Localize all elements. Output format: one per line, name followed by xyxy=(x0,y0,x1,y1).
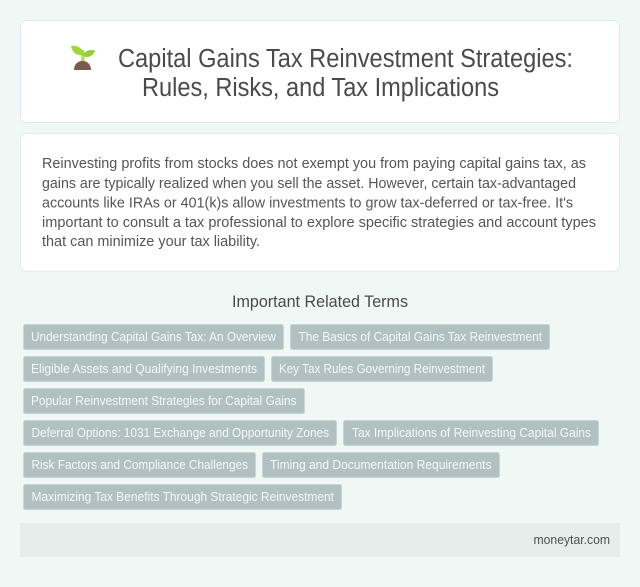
chip: risk factors: Risk Factors and Compliance Challenges xyxy=(32,457,248,472)
title text: Rules, Risks, and Tax Implications xyxy=(142,74,499,102)
chip: timing and documentation: Timing and Documentation Requirements xyxy=(270,457,492,472)
chip: basics of reinvestment xyxy=(290,324,550,350)
panel: summary paragraph: Reinvesting profits from stocks does not exempt you from paying capital gains tax, as xyxy=(42,155,586,172)
panel: summary paragraph: gains are typically realized when you sell the asset. However, certain tax-advantaged xyxy=(42,175,576,192)
chip: basics of reinvestment: The Basics of Capital Gains Tax Reinvestment xyxy=(298,329,542,344)
chip: understanding capital gains tax xyxy=(24,324,284,350)
chip: eligible assets: Eligible Assets and Qualifying Investments xyxy=(31,361,257,376)
panel: summary paragraph: accounts like IRAs or 401(k)s allow investments to grow tax-deferred or tax-free. It's xyxy=(42,194,573,212)
panel: summary paragraph xyxy=(20,134,620,272)
chip: understanding capital gains tax: Understanding Capital Gains Tax: An Overview xyxy=(31,329,277,344)
title text xyxy=(118,45,573,102)
icon: sprout xyxy=(71,46,95,70)
chip: maximizing tax benefits xyxy=(24,484,342,510)
chip: popular strategies xyxy=(24,388,304,414)
chip: tax implications xyxy=(344,420,598,446)
panel: title card xyxy=(20,20,620,122)
chip: risk factors xyxy=(24,452,256,478)
chip: popular strategies: Popular Reinvestment Strategies for Capital Gains xyxy=(31,393,297,408)
chip: deferral options: Deferral Options: 1031 Exchange and Opportunity Zones xyxy=(32,425,329,440)
footer bar xyxy=(20,523,620,557)
title text: Capital Gains Tax Reinvestment Strategies: xyxy=(118,45,573,73)
panel: summary paragraph: that can minimize your tax liability. xyxy=(42,233,260,250)
chip: tax implications: Tax Implications of Reinvesting Capital Gains xyxy=(352,425,591,440)
chip: deferral options xyxy=(24,420,336,446)
panel: related term chips xyxy=(24,324,598,510)
chip: maximizing tax benefits: Maximizing Tax Benefits Through Strategic Reinvestment xyxy=(32,489,334,504)
chip: key tax rules: Key Tax Rules Governing Reinvestment xyxy=(279,361,485,376)
heading: important related terms: Important Related Terms xyxy=(232,292,408,311)
chip: eligible assets xyxy=(24,356,264,382)
chip: timing and documentation xyxy=(262,452,500,478)
panel: summary paragraph: important to consult a tax professional to explore specific strategies and account types xyxy=(42,214,596,231)
chip: key tax rules xyxy=(272,356,492,382)
footer site name: moneytar.com xyxy=(534,532,610,547)
